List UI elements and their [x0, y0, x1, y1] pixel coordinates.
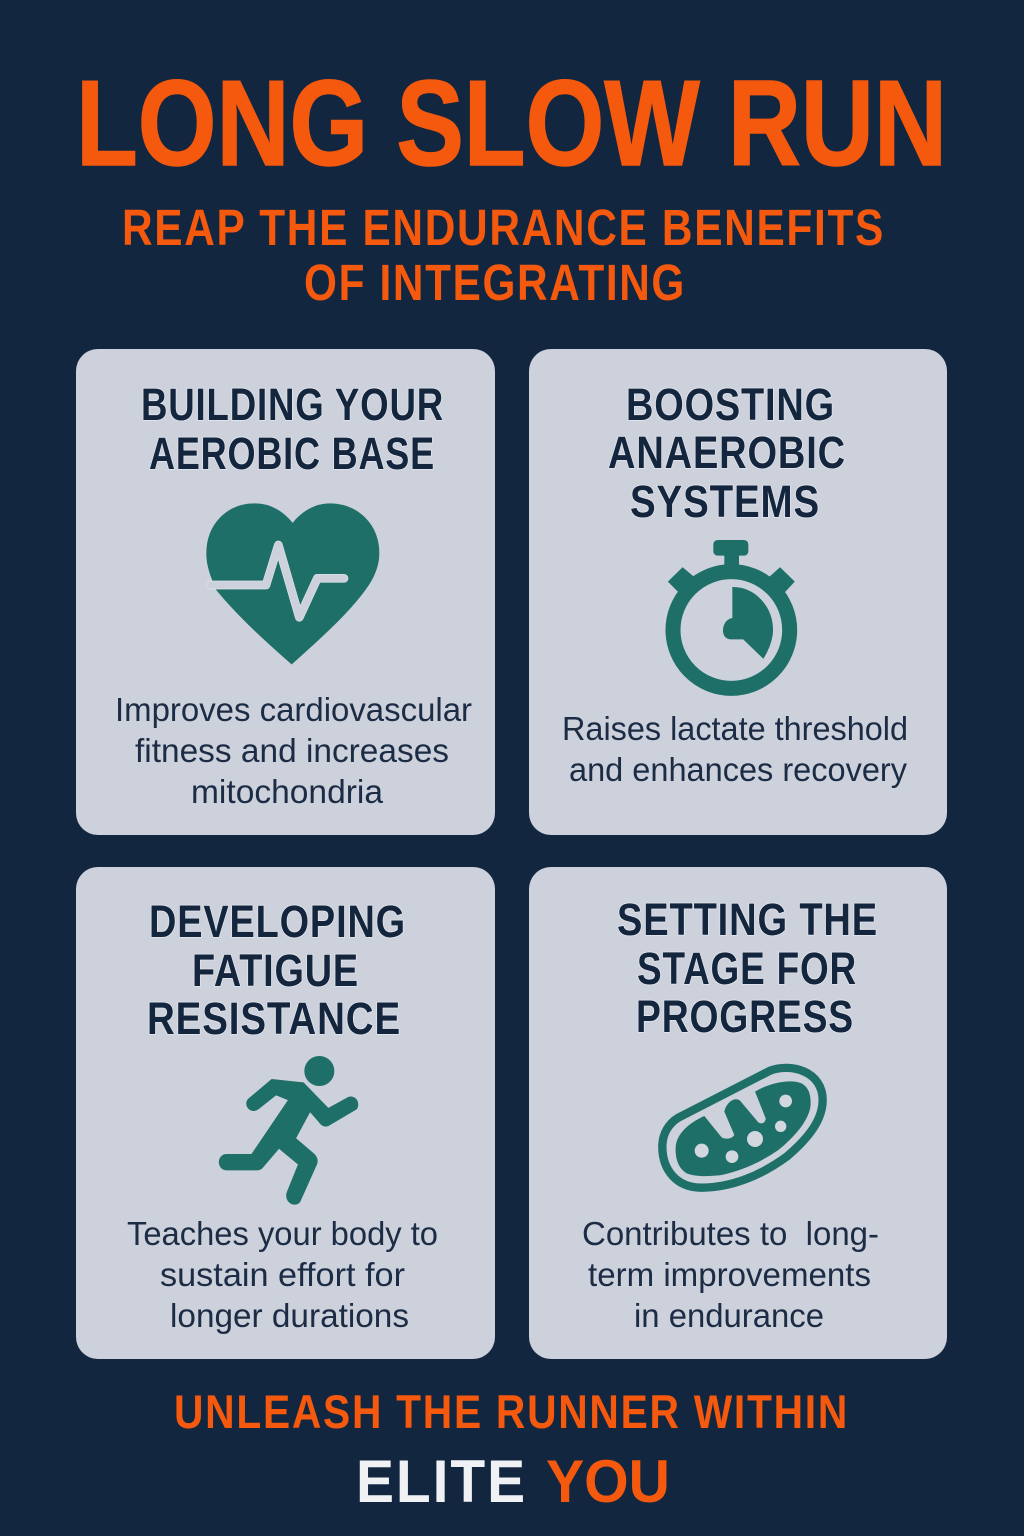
heading: developing fatigue resistance: [147, 896, 406, 1044]
heading: setting the stage for progress: PROGRESS: [636, 991, 854, 1042]
subtitle: OF INTEGRATING: [304, 254, 686, 311]
heading: boosting anaerobic systems: BOOSTING: [626, 379, 835, 430]
panel: building your aerobic base: [76, 349, 495, 835]
heading: boosting anaerobic systems: SYSTEMS: [630, 476, 820, 527]
brand: elite you: ELITE: [356, 1448, 527, 1515]
brand: elite you: [356, 1448, 670, 1515]
text: progress benefit: Contributes to long-: [582, 1216, 879, 1253]
text: fatigue benefit: [127, 1216, 438, 1335]
text: aerobic base benefit: Improves cardiovascular: [115, 692, 472, 729]
heading: building your aerobic base: [141, 379, 444, 479]
text: progress benefit: term improvements: [588, 1257, 871, 1294]
icon: heart with pulse line: [207, 504, 379, 664]
tagline: UNLEASH THE RUNNER WITHIN: [174, 1385, 849, 1438]
heading: developing fatigue resistance: DEVELOPING: [149, 896, 406, 947]
text: anaerobic benefit: [562, 711, 908, 789]
text: fatigue benefit: Teaches your body to: [127, 1216, 438, 1253]
heading: boosting anaerobic systems: ANAEROBIC: [608, 427, 846, 478]
panel: developing fatigue resistance: [76, 867, 495, 1359]
icon: stopwatch: [668, 540, 794, 688]
heading: boosting anaerobic systems: [608, 379, 846, 527]
heading: developing fatigue resistance: FATIGUE: [192, 945, 359, 996]
text: progress benefit: [582, 1216, 879, 1335]
text: aerobic base benefit: mitochondria: [191, 774, 383, 811]
brand: elite you: YOU: [546, 1448, 670, 1515]
heading: developing fatigue resistance: RESISTANCE: [147, 993, 401, 1044]
panel: boosting anaerobic systems: [529, 349, 947, 835]
text: anaerobic benefit: and enhances recovery: [569, 752, 907, 789]
icon: runner: [219, 1056, 358, 1204]
heading: building your aerobic base: BUILDING YOUR: [141, 379, 444, 430]
text: aerobic base benefit: fitness and increases: [135, 733, 449, 770]
text: anaerobic benefit: Raises lactate threshold: [562, 711, 908, 748]
heading: building your aerobic base: AEROBIC BASE: [149, 428, 435, 479]
icon: mitochondrion: [662, 1068, 823, 1188]
subtitle: REAP THE ENDURANCE BENEFITS: [122, 199, 885, 256]
heading: setting the stage for progress: [617, 894, 878, 1042]
panel: setting the stage for progress: [529, 867, 947, 1359]
heading: setting the stage for progress: SETTING THE: [617, 894, 878, 945]
text: progress benefit: in endurance: [634, 1298, 824, 1335]
text: fatigue benefit: sustain effort for: [160, 1257, 405, 1294]
heading: setting the stage for progress: STAGE FOR: [637, 943, 857, 994]
text: aerobic base benefit: [115, 692, 472, 811]
subtitle: [122, 199, 885, 311]
text: fatigue benefit: longer durations: [170, 1298, 409, 1335]
